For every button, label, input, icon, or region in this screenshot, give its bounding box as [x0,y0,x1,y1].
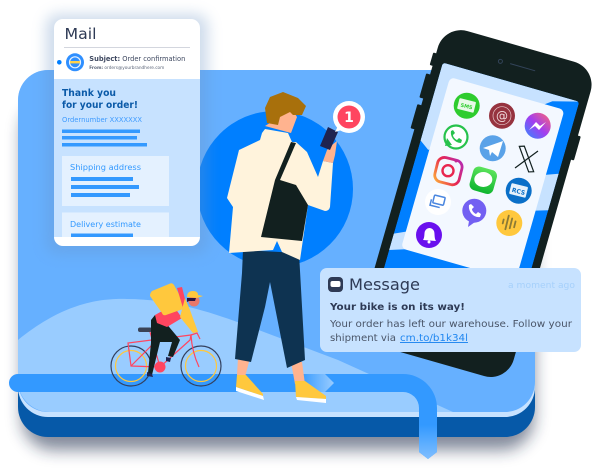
mail heading: Thank you [62,88,116,99]
icon: Messenger [525,113,551,139]
shipping address box: Shipping address [70,163,141,172]
panel: backdrop stage [18,70,535,450]
phone screen [384,63,579,268]
notification badge [333,101,365,133]
saddle [138,328,152,332]
shoes [236,375,263,396]
icon: RCS: RCS [511,187,526,197]
bag [261,142,308,241]
handheld phone [320,127,338,150]
subject: Subject: Order confirmation [89,55,185,63]
icon: SMS [454,93,480,119]
road [9,374,437,459]
arm [180,298,198,333]
rider shirt [155,305,182,327]
icon: RCS [506,178,532,204]
neck and head [265,106,297,133]
icon: SMS: SMS [460,103,473,111]
frame [128,332,200,367]
rider head [188,296,200,306]
person [227,92,338,403]
legs [148,315,180,375]
text bars [62,130,147,146]
sender line: From: orders@yourbrandhere.com [89,65,164,71]
icon: Telegram [480,135,506,161]
delivery estimate box: Delivery estimate [70,220,141,229]
mail heading: for your order! [62,100,138,111]
message heading: Your bike is on its way! [329,302,465,313]
panel: mail card [46,14,208,254]
icon: voice [496,210,522,236]
message body: shipment via [330,333,396,344]
mail title: Mail [64,25,96,43]
icon: email: @ [496,109,508,123]
panel: message notification [320,268,581,352]
message app card [401,77,565,281]
icon: email [489,103,515,129]
hair [265,92,306,125]
road end fade [419,425,437,459]
order number: Ordernumber XXXXXXX [62,116,142,124]
icon: chat [425,189,451,215]
sender avatar [66,53,84,71]
wheels [111,346,221,386]
icon: Instagram [433,156,464,186]
message body: cm.to/b1k34l [400,333,468,344]
icon: X [515,146,538,172]
cyclist [111,283,221,386]
icon: notification bell [416,222,442,248]
blue circle behind person [197,111,353,267]
phone side buttons [411,52,592,174]
hand [323,141,337,163]
road arrow [300,374,334,392]
trousers [235,250,305,368]
icon: message bubble [328,277,343,292]
jacket [227,129,333,260]
icon: Viber [462,199,486,227]
delivery estimate box [62,212,169,237]
message body: Your order has left our warehouse. Follow your [329,319,572,330]
timestamp: a moment ago [508,281,575,291]
app icons [416,93,551,248]
icon: WhatsApp [444,126,468,148]
light hill [18,299,453,412]
pack strap [177,287,187,308]
notification badge: 1 [344,110,354,126]
phone [374,30,592,377]
legs skin [237,358,305,384]
message title: Message [349,275,420,294]
shipping address box [62,156,169,206]
icon: iMessage [468,165,498,195]
backpack [150,283,185,315]
